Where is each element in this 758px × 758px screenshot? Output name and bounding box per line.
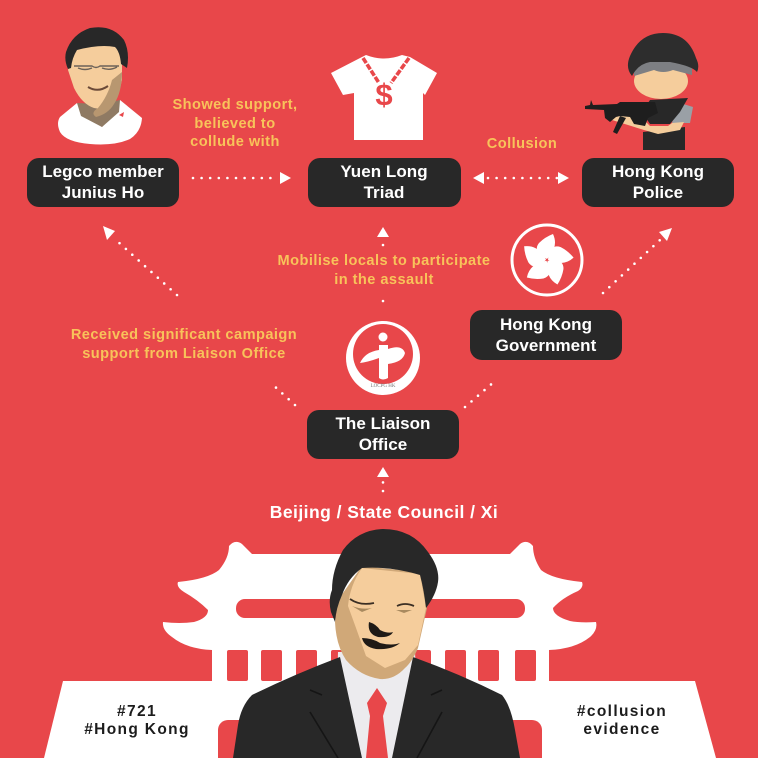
- icon: T-shirt with dollar chain: [331, 55, 437, 140]
- label: Showed support: Showed support,: [172, 97, 298, 113]
- node: Legco member Junius Ho: [27, 158, 179, 207]
- icon: T-shirt with dollar chain: $: [375, 77, 393, 112]
- shirt: [335, 652, 420, 758]
- label: Mobilise locals: Mobilise locals to participate: [278, 253, 490, 269]
- suit: [233, 657, 520, 758]
- arrow: Government to Police: [603, 228, 672, 293]
- icon: Liaison Office logo: LOCPG HK: [371, 384, 396, 389]
- icon: Hong Kong bauhinia emblem: [512, 225, 582, 295]
- icon: Liaison Office logo: [346, 321, 420, 395]
- nose and mouth: [362, 622, 400, 649]
- arrow: Triad mobilises: [377, 227, 389, 301]
- hashtag: #721 #Hong Kong: #721: [117, 703, 157, 720]
- node: Hong Kong Government: Hong Kong: [500, 315, 592, 334]
- tie: [366, 688, 388, 758]
- node: Yuen Long Triad: [308, 158, 461, 207]
- face: [335, 566, 427, 679]
- node: Hong Kong Government: Government: [496, 336, 597, 355]
- gate illustration: [44, 542, 716, 758]
- arrow: Junius Ho to Triad: [193, 172, 291, 184]
- node: Legco member Junius Ho: Legco member: [42, 162, 164, 181]
- node: The Liaison Office: Office: [359, 435, 407, 454]
- arrow: Triad and Police: [473, 172, 569, 184]
- hashtag: #collusion evidence: evidence: [583, 721, 661, 738]
- arrow: Beijing to Liaison: [377, 467, 389, 491]
- node: Yuen Long Triad: Triad: [364, 183, 404, 202]
- node: Hong Kong Government: [470, 310, 622, 360]
- icon: Junius Ho portrait: [58, 27, 142, 144]
- arrow: Liaison to Government: [465, 381, 495, 407]
- node: Hong Kong Police: Hong Kong: [612, 162, 704, 181]
- node: Hong Kong Police: Police: [633, 183, 683, 202]
- label: Received campaign support: support from Liaison Office: [82, 346, 286, 362]
- node: Legco member Junius Ho: Junius Ho: [62, 183, 144, 202]
- node: Hong Kong Police: [582, 158, 734, 207]
- node: The Liaison Office: The Liaison: [335, 414, 431, 433]
- label: Received campaign support: Received significant campaign: [71, 327, 297, 343]
- eyes: [350, 599, 414, 606]
- icon: riot police officer: [585, 33, 698, 150]
- label: Showed support: believed to: [194, 116, 276, 132]
- node: Yuen Long Triad: Yuen Long: [340, 162, 428, 181]
- node: The Liaison Office: [307, 410, 459, 459]
- label: Showed support: collude with: [190, 134, 280, 150]
- heading: Beijing / State Council / Xi: Beijing / State Council / Xi: [270, 502, 498, 522]
- hashtag: #collusion evidence: #collusion: [577, 703, 667, 720]
- arrow: Liaison to Junius Ho: [103, 226, 295, 405]
- hashtag: #721 #Hong Kong: #Hong Kong: [84, 721, 190, 738]
- figure: Xi portrait: [233, 529, 520, 758]
- label: Collusion: Collusion: [487, 136, 557, 152]
- hair: [330, 529, 438, 622]
- label: Mobilise locals: in the assault: [334, 272, 434, 288]
